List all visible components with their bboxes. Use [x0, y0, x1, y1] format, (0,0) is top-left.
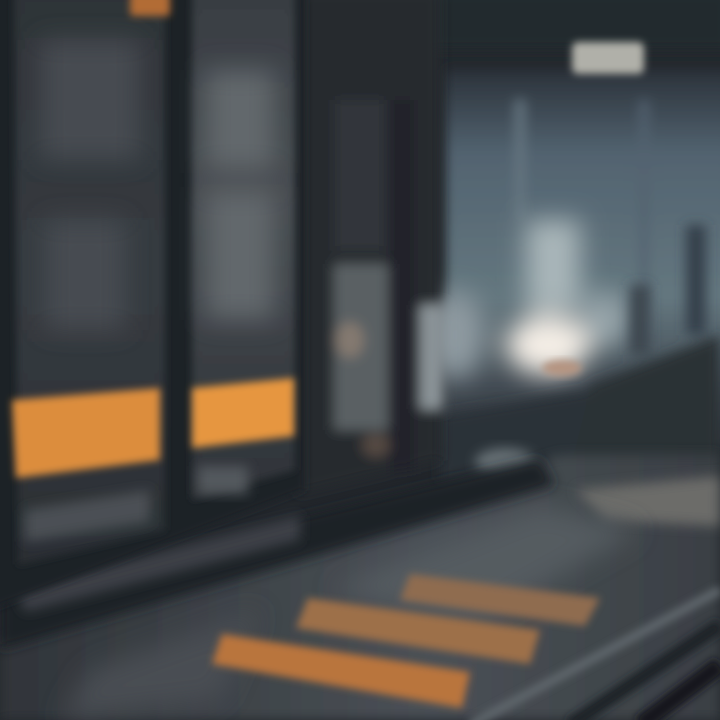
lower panel highlight [25, 490, 150, 542]
pillar bright section [334, 264, 388, 430]
orange band right [192, 378, 294, 448]
right cabinet panel [192, 0, 295, 500]
top orange marker [130, 0, 170, 16]
left cabinet panel [0, 0, 305, 610]
central dark pillars [296, 0, 444, 495]
bright glow [425, 220, 629, 379]
dark silhouettes [440, 225, 720, 480]
floor rail lines [470, 590, 720, 720]
orange floor stripes [212, 574, 600, 708]
dark ledge below panels [0, 458, 555, 650]
panel texture [40, 40, 140, 330]
floor highlight [575, 476, 720, 526]
orange band left [12, 388, 160, 478]
ceiling light [572, 42, 644, 74]
distant machinery and glow [425, 220, 720, 480]
window: bluish distant background [430, 0, 720, 450]
floor [0, 448, 720, 720]
warm highlight [542, 360, 582, 376]
